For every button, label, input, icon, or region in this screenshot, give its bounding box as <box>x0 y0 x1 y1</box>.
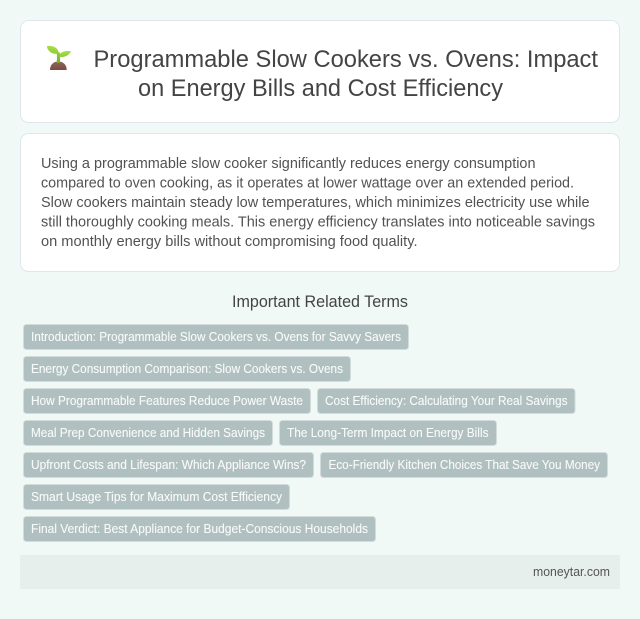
footer <box>20 555 620 589</box>
text block: description: on monthly energy bills without compromising food quality. <box>41 234 417 250</box>
tag: introduction <box>24 324 408 350</box>
tag: energy consumption: Energy Consumption Comparison: Slow Cookers vs. Ovens <box>31 362 343 376</box>
title: on Energy Bills and Cost Efficiency <box>138 76 503 102</box>
tag: smart usage: Smart Usage Tips for Maximum Cost Efficiency <box>31 490 283 504</box>
text block: description: Slow cookers maintain steady low temperatures, which minimizes electricity use while <box>41 195 590 211</box>
tag: programmable features: How Programmable Features Reduce Power Waste <box>31 394 303 408</box>
panel: term tags <box>24 324 608 542</box>
tag: eco-friendly <box>320 452 608 478</box>
tag: cost efficiency <box>318 388 575 414</box>
text block: description: compared to oven cooking, as it operates at lower wattage over an extended period. <box>41 176 574 192</box>
text block: description <box>41 156 595 250</box>
heading: related terms: Important Related Terms <box>232 293 408 311</box>
tag: final verdict <box>24 516 376 542</box>
tag: eco-friendly: Eco-Friendly Kitchen Choices That Save You Money <box>328 458 601 472</box>
tag: upfront costs <box>24 452 314 478</box>
title: Programmable Slow Cookers vs. Ovens: Impact <box>94 47 598 73</box>
text block: description: still thoroughly cooking meals. This energy efficiency translates into noticeable savings <box>41 214 595 230</box>
tag: upfront costs: Upfront Costs and Lifespan: Which Appliance Wins? <box>31 458 306 472</box>
panel: description card <box>20 134 620 272</box>
footer: source: moneytar.com <box>533 565 610 579</box>
tag: final verdict: Final Verdict: Best Appliance for Budget-Conscious Households <box>31 522 368 536</box>
tag: long-term impact: The Long-Term Impact on Energy Bills <box>287 426 488 440</box>
tag: energy consumption <box>24 356 350 382</box>
tag: meal prep <box>24 420 272 446</box>
tag: introduction: Introduction: Programmable Slow Cookers vs. Ovens for Savvy Savers <box>31 330 401 344</box>
tag: meal prep: Meal Prep Convenience and Hidden Savings <box>31 426 265 440</box>
tag: smart usage <box>24 484 290 510</box>
title <box>94 47 598 102</box>
icon: sprout <box>47 46 71 70</box>
text block: description: Using a programmable slow cooker significantly reduces energy consumption <box>41 156 536 172</box>
tag: cost efficiency: Cost Efficiency: Calculating Your Real Savings <box>325 394 568 408</box>
tag: programmable features <box>24 388 310 414</box>
panel: header card <box>20 20 620 122</box>
tag: long-term impact <box>280 420 496 446</box>
